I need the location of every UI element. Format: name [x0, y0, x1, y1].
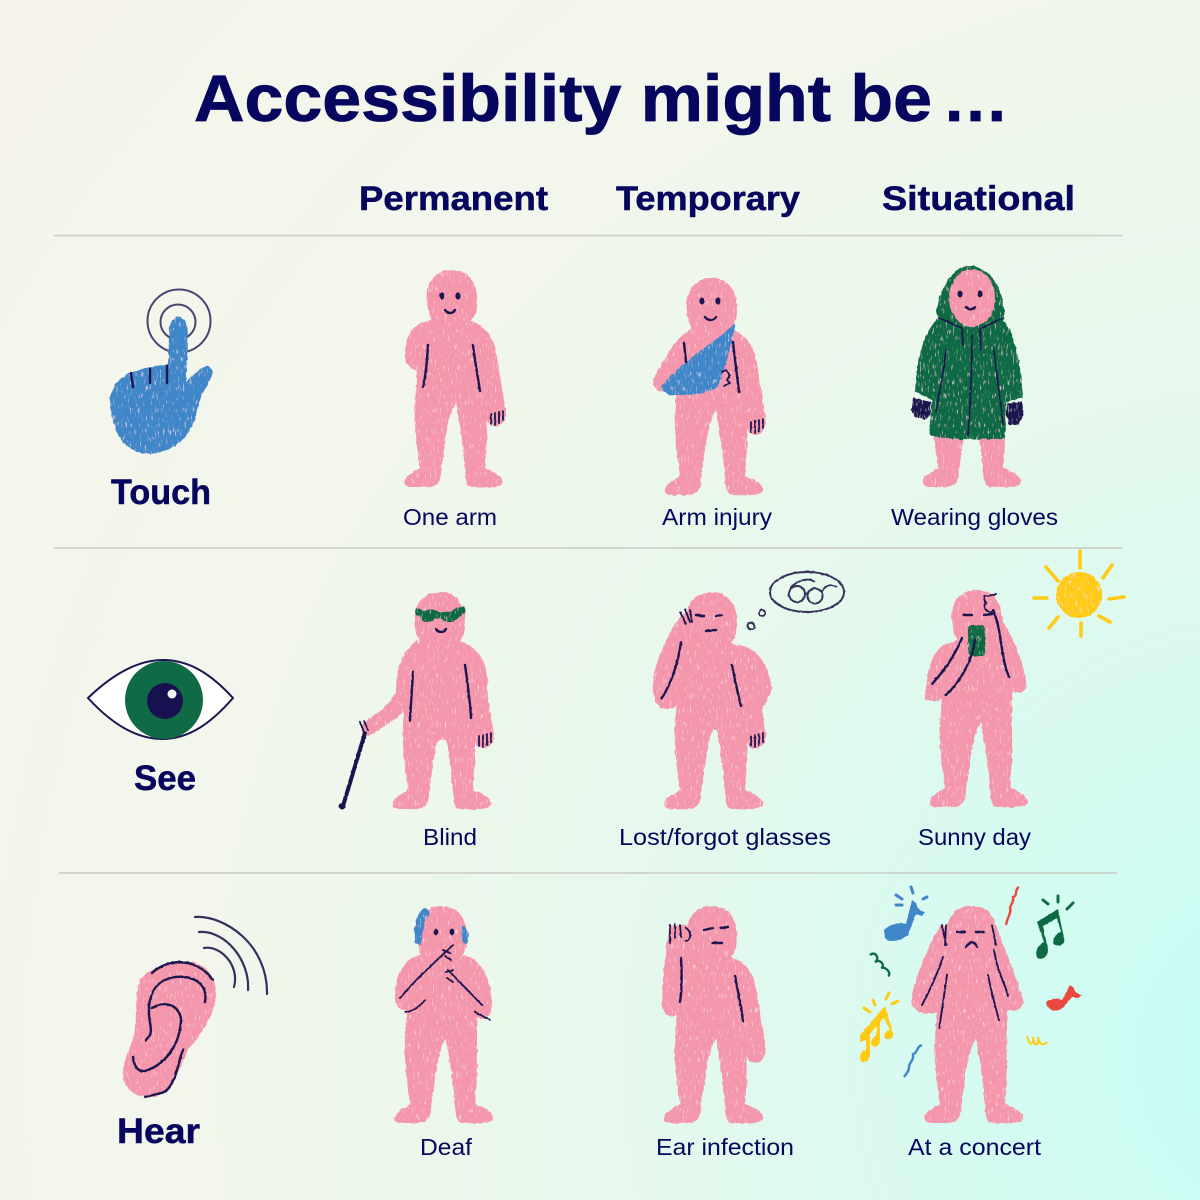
caption: Sunny day: Sunny day: [918, 824, 1032, 850]
caption: Ear infection: Ear infection: [656, 1134, 794, 1160]
label: Hear: Hear: [117, 1112, 200, 1151]
figure: sunny day: [925, 590, 1028, 807]
icon: ear: [123, 917, 267, 1097]
column heading: Temporary: Temporary: [616, 180, 800, 218]
caption: Arm injury: Arm injury: [662, 504, 773, 530]
caption: Deaf: Deaf: [420, 1134, 473, 1160]
figure: blind: [338, 592, 494, 810]
figure: one arm: [405, 270, 506, 487]
figure: ear infection: [662, 906, 766, 1123]
label: See: See: [134, 759, 196, 798]
figure: wearing gloves: [911, 266, 1024, 487]
caption: Wearing gloves: Wearing gloves: [891, 504, 1058, 530]
caption: One arm: One arm: [403, 504, 497, 530]
figure: at a concert: [911, 906, 1023, 1123]
column heading: Situational: Situational: [882, 180, 1075, 218]
caption: Blind: Blind: [423, 824, 477, 850]
icon: thought bubble with glasses: [748, 572, 844, 630]
column heading: Permanent: Permanent: [359, 180, 548, 218]
icon: sun: [1034, 551, 1124, 636]
icon: eye: [88, 660, 233, 739]
figure: deaf: [395, 906, 493, 1123]
label: Touch: Touch: [111, 473, 211, 512]
figure: lost or forgotten glasses: [653, 592, 772, 809]
icon: touch hand: [110, 290, 212, 454]
title: Accessibility might be: [194, 61, 932, 135]
figure: arm injury: [653, 278, 766, 495]
title: ...: [945, 61, 1009, 135]
caption: Lost/forgot glasses: Lost/forgot glasses: [619, 824, 831, 850]
caption: At a concert: At a concert: [908, 1134, 1042, 1160]
icon: music notes: [860, 887, 1082, 1077]
